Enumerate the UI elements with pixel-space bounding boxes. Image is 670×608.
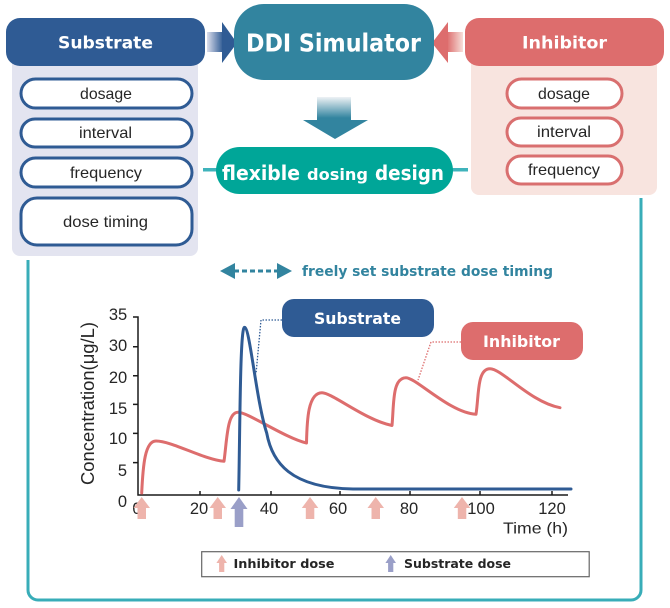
legend arrow: inhibitor [216,555,227,572]
substrate parameter: dose timing: dose timing [63,214,148,231]
legend arrow: substrate [385,555,396,572]
substrate parameter: dosage [21,79,192,108]
substrate parameter: interval: interval [79,125,132,142]
legend [202,552,589,577]
flexible dosing design box: flexible [222,161,300,185]
DDI Simulator box [234,4,434,80]
callout: inhibitor [461,322,583,360]
substrate curve [239,327,571,490]
inhibitor parameter: frequency: frequency [528,162,600,179]
dose arrows: inhibitor [134,497,470,519]
y axis labels: 10 [109,430,127,448]
inhibitor parameter: frequency [507,156,622,184]
y axis title: Concentration(μg/L) [78,322,98,485]
callout: substrate [282,299,434,337]
legend label: substrate: Substrate dose [404,557,511,571]
x axis labels: 20 [190,500,208,518]
inhibitor parameter: dosage [507,79,622,108]
x axis labels: 80 [400,500,418,518]
inhibitor parameter: interval: interval [537,124,591,141]
x axis labels: 40 [260,500,278,518]
connector: left [203,168,217,172]
x axis labels: 0 [132,500,142,518]
arrow: substrate to simulator [207,22,237,63]
callout: substrate: Substrate [314,309,401,328]
substrate heading: Substrate [58,34,153,54]
panel: substrate [6,18,205,256]
arrow: freely set timing [220,263,292,279]
y axis labels: 35 [109,306,127,324]
inhibitor heading [465,18,664,66]
connector: right [452,168,468,172]
y axis labels [109,306,127,511]
y axis labels: 30 [109,337,127,355]
y axis labels: 5 [118,462,127,480]
flexible dosing design box [216,147,453,194]
substrate parameter: frequency [21,158,192,187]
axes [133,317,568,495]
x axis labels: 120 [538,500,566,518]
x axis labels: 100 [467,500,495,518]
leader: substrate [256,320,282,374]
inhibitor heading: Inhibitor [522,34,608,54]
y axis labels: 20 [109,369,127,387]
inhibitor curve [142,369,560,493]
callout: inhibitor: Inhibitor [483,332,560,351]
substrate parameter: interval [21,119,192,147]
substrate parameter: dose timing [21,198,192,245]
DDI Simulator box: DDI Simulator [246,28,422,58]
x axis labels [132,500,566,518]
x axis labels: 60 [329,500,347,518]
flexible dosing design box: dosing [307,165,368,184]
substrate parameter: frequency: frequency [70,165,142,182]
y axis labels: 15 [109,400,127,418]
inhibitor parameter: dosage: dosage [538,86,590,103]
leader: inhibitor [418,342,461,380]
substrate parameter: dosage: dosage [80,86,132,103]
caption: freely set timing: freely set substrate dose timing [302,264,553,280]
inhibitor parameter: interval [507,118,622,146]
frame: results outline [28,198,641,600]
x axis title: Time (h) [503,520,568,538]
flexible dosing design box: design [375,161,444,185]
chart: concentration over time [78,299,583,538]
arrow: inhibitor to simulator [432,22,463,63]
legend label: inhibitor: Inhibitor dose [234,557,334,571]
arrow: simulator to dosing design [303,97,368,139]
substrate heading [6,18,205,66]
dose arrow: substrate [230,497,248,527]
y axis labels: 0 [118,493,127,511]
panel: inhibitor [465,18,664,195]
